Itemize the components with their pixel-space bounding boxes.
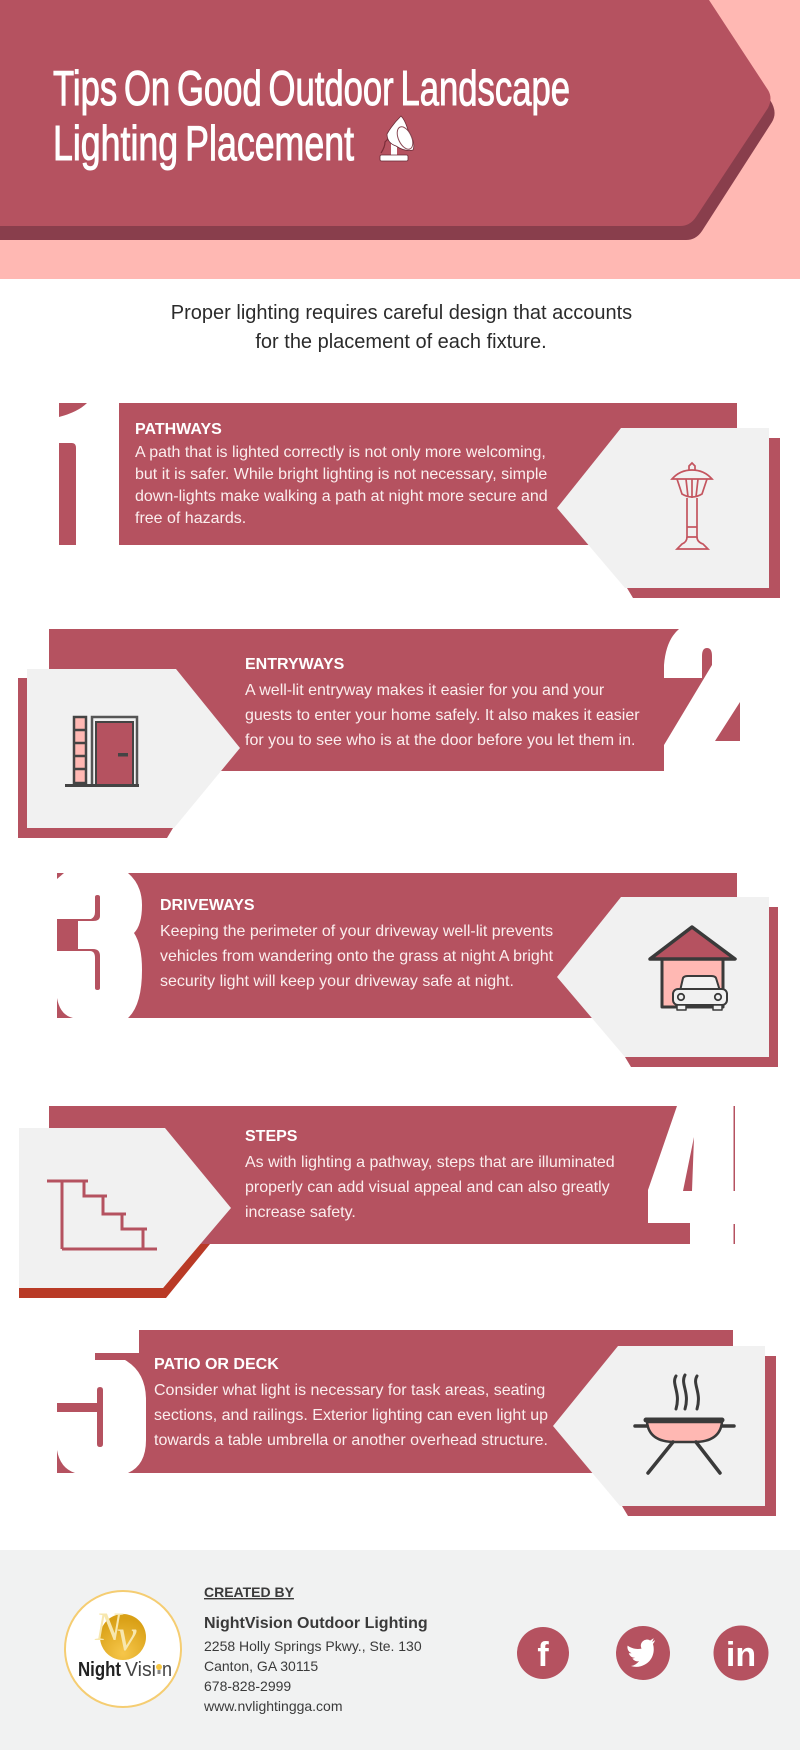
credit text: www.nvlightingga.com [203, 1698, 343, 1714]
text: patio or deck: sections, and railings. Exterior lighting can even light up [154, 1407, 548, 1424]
icon card 4 [19, 1128, 231, 1298]
credit text [203, 1584, 428, 1714]
intro text [171, 302, 632, 353]
text: driveways: security light will keep your driveway safe at night. [160, 973, 514, 990]
text: driveways [160, 897, 554, 990]
icon: facebook [517, 1627, 569, 1679]
numeral 3: 3 [50, 852, 144, 1045]
text: pathways: free of hazards. [135, 510, 246, 527]
text: steps: properly can add visual appeal and can also greatly [245, 1179, 610, 1196]
text: pathways [135, 421, 548, 527]
icon: linkedin [714, 1626, 768, 1680]
numeral 1 [59, 403, 87, 545]
text: steps [245, 1128, 615, 1221]
text: patio or deck: Consider what light is necessary for task areas, seating [154, 1382, 545, 1399]
ribbon 1 [119, 403, 737, 545]
credit text: 2258 Holly Springs Pkwy., Ste. 130 [204, 1638, 422, 1654]
panel: entryways [18, 581, 767, 838]
credit text: Canton, GA 30115 [204, 1658, 318, 1674]
numeral 4: 4 [647, 1079, 744, 1289]
numeral 1: 1 [20, 365, 163, 632]
credit text: CREATED BY [204, 1584, 295, 1600]
text: steps: As with lighting a pathway, steps that are illuminated [245, 1154, 615, 1171]
text: entryways: A well-lit entryway makes it easier for you and your [245, 682, 605, 699]
ribbon 3 [57, 873, 737, 1018]
logo [65, 1591, 181, 1707]
panel: driveways [57, 873, 778, 1067]
text: pathways: A path that is lighted correctly is not only more welcoming, [135, 444, 546, 461]
text: driveways: Keeping the perimeter of your driveway well-lit prevents [160, 923, 553, 940]
intro text: for the placement of each fixture. [255, 331, 547, 353]
text: entryways: for you to see who is at the door before you let them in. [245, 732, 635, 749]
ribbon 5 [57, 1330, 733, 1473]
panel: pathways [20, 365, 780, 632]
numeral 5: 5 [42, 1297, 150, 1509]
text: pathways: PATHWAYS [135, 421, 222, 438]
credit text: 678-828-2999 [204, 1678, 291, 1694]
logo: n [162, 1659, 172, 1681]
icon card 2 [18, 669, 240, 838]
panel: steps [19, 1079, 744, 1298]
icon: spotlight [380, 116, 416, 161]
text: driveways: DRIVEWAYS [160, 897, 255, 914]
title [53, 62, 570, 171]
icon: facebook: f [537, 1636, 549, 1674]
icon card 5 [553, 1346, 776, 1516]
numeral 4 [648, 1106, 735, 1244]
icon: linkedin: in [726, 1636, 756, 1674]
text: pathways: down-lights make walking a path at night more secure and [135, 488, 548, 505]
credit text: NightVision Outdoor Lighting [204, 1615, 428, 1632]
icon: twitter [616, 1626, 670, 1680]
text: steps: increase safety. [245, 1204, 356, 1221]
numeral 5 [57, 1353, 146, 1473]
panel: patio or deck [57, 1330, 776, 1516]
logo: Night [78, 1659, 121, 1681]
numeral 2 [664, 629, 740, 745]
icon: stairs [47, 1181, 157, 1249]
ribbon 2 [49, 629, 664, 771]
icon: garage [650, 927, 735, 1010]
numeral 2: 2 [656, 581, 767, 814]
icon: door [65, 717, 139, 787]
logo: Visi [125, 1659, 156, 1681]
footer [0, 1550, 800, 1750]
text: steps: STEPS [245, 1128, 298, 1145]
icon: lamp post [672, 463, 712, 549]
text: driveways: vehicles from wandering onto the grass at night A bright [160, 948, 554, 965]
icon: grill [635, 1375, 734, 1473]
ribbon 4 [49, 1106, 735, 1244]
text: patio or deck: towards a table umbrella or another overhead structure. [154, 1432, 548, 1449]
header banner [0, 0, 800, 279]
title: Lighting Placement [53, 117, 354, 171]
logo: N [94, 1604, 124, 1649]
numeral 3 [57, 873, 142, 1018]
text: pathways: but it is safer. While bright lighting is not necessary, simple [135, 466, 547, 483]
icon card 3 [557, 897, 778, 1067]
logo: v [117, 1611, 137, 1660]
text: entryways [245, 656, 640, 749]
text: patio or deck [154, 1356, 548, 1449]
icon card 1 [557, 428, 780, 598]
text: patio or deck: PATIO OR DECK [154, 1356, 279, 1373]
intro text: Proper lighting requires careful design that accounts [171, 302, 632, 324]
text: entryways: guests to enter your home safely. It also makes it easier [245, 707, 640, 724]
text: entryways: ENTRYWAYS [245, 656, 345, 673]
title: Tips On Good Outdoor Landscape [53, 62, 570, 116]
